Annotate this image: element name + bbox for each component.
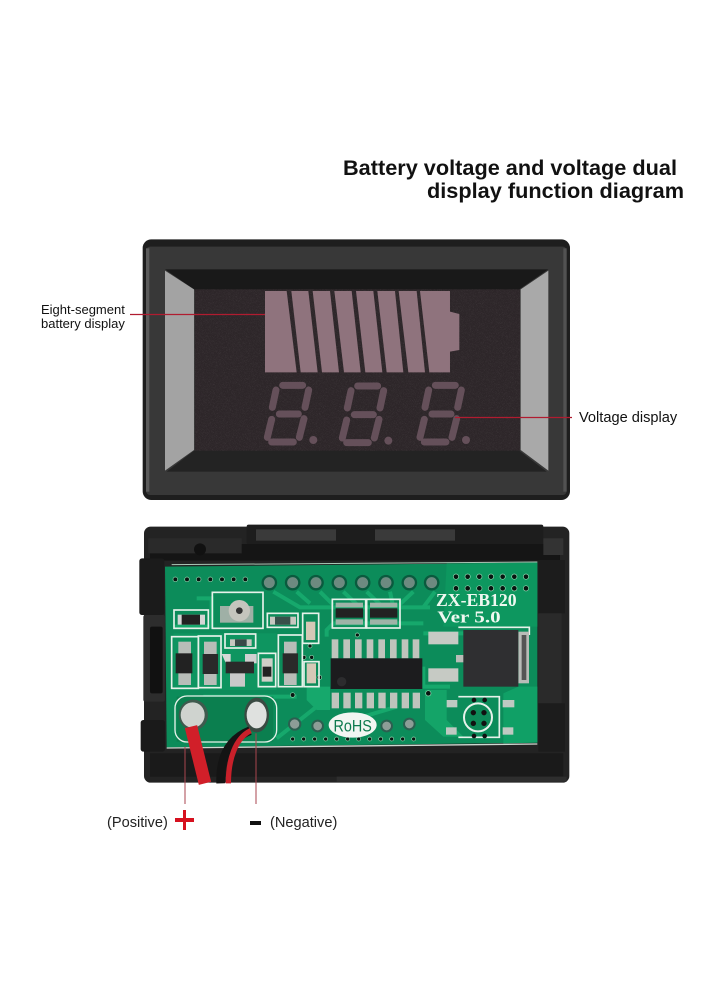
RoHS mark: RoHS bbox=[333, 716, 372, 735]
panel: front of voltmeter display bbox=[143, 239, 570, 500]
title: display function diagram bbox=[427, 179, 684, 203]
green circuit board bbox=[165, 562, 537, 748]
label: positive terminal: (Positive) bbox=[107, 815, 168, 831]
title bbox=[343, 156, 684, 203]
callout: eight-segment battery display: battery display bbox=[41, 316, 125, 331]
board marking bbox=[436, 590, 517, 627]
eight-segment battery icon bbox=[265, 291, 459, 372]
label: negative terminal: (Negative) bbox=[270, 815, 337, 831]
via dots bbox=[173, 574, 529, 741]
wires bbox=[191, 727, 251, 783]
small surface-mount components bbox=[176, 600, 397, 687]
board marking: ZX-EB120 bbox=[436, 590, 517, 610]
callout: eight-segment battery display bbox=[41, 302, 265, 331]
SOP-16 integrated circuit bbox=[331, 639, 422, 708]
display window bbox=[195, 289, 520, 451]
callout: voltage display: Voltage display bbox=[579, 410, 678, 426]
leader lines bbox=[185, 733, 256, 804]
callout: eight-segment battery display: Eight-segment bbox=[41, 302, 125, 317]
bezel bbox=[143, 239, 570, 500]
board marking: Ver 5.0 bbox=[437, 608, 501, 627]
rear case bbox=[139, 525, 569, 783]
bottom solder pins bbox=[289, 718, 415, 731]
white silkscreen outlines bbox=[172, 592, 529, 742]
power transistor bbox=[428, 630, 529, 687]
panel: back of voltmeter circuit board bbox=[139, 525, 569, 804]
three seven-segment voltage digits bbox=[267, 385, 470, 445]
label: positive terminal bbox=[107, 810, 194, 831]
top row solder pins bbox=[263, 576, 438, 589]
title: Battery voltage and voltage dual bbox=[343, 156, 677, 180]
RoHS mark bbox=[329, 712, 377, 738]
trimmed pad component bbox=[446, 698, 514, 738]
solder pads bbox=[179, 698, 269, 732]
